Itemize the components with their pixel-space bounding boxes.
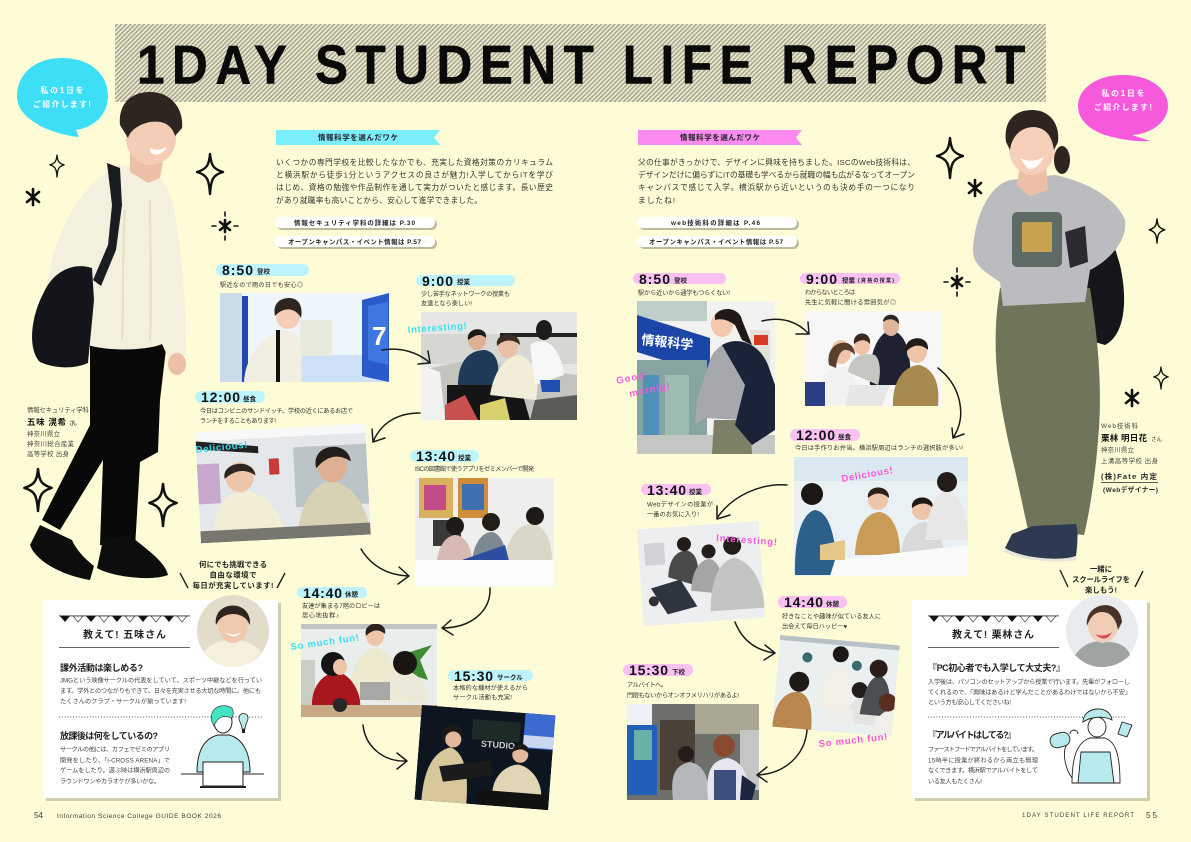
profile: Gomi: 神奈川総合産業 (27, 439, 75, 448)
timeline left: 12:00: 昼食 (243, 394, 256, 403)
link pills right: オープンキャンパス・イベント情報は P.57 (649, 237, 783, 246)
timeline right: 14:40: 出会えて毎日ハッピー♥ (782, 622, 847, 630)
photo 15:30: STUDIO (481, 739, 515, 751)
student photo: Gomi (30, 92, 186, 580)
timeline left: 12:00: 12:00 (201, 389, 240, 405)
timeline right: 15:30: 下校 (672, 667, 686, 676)
sparkles left (24, 154, 238, 526)
profile: Kuribayashi: さん (1151, 436, 1162, 443)
link pills right: web技術科の詳細は P.46 (670, 218, 760, 227)
timeline right: 15:30: アルバイトへ。 (627, 682, 667, 689)
Q1 right: てくれるので、『興味はあるけど学んだことがあるわけではないから不安』 (928, 688, 1131, 696)
Q1 left: たくさんのクラブ・サークルが揃っています! (60, 698, 186, 706)
Q1 right: 入学後は、パソコンのセットアップから授業で行います。先輩がフォローし (928, 678, 1130, 686)
timeline left: 15:30: サークル (497, 672, 523, 682)
bunting left (59, 616, 190, 622)
footer left: 54 (34, 810, 43, 820)
Q2 left (60, 730, 170, 786)
Q1 left: JMGという映像サークルの代表をしていて、スポーツ中継などを行ってい (60, 676, 262, 684)
quote right: 一緒に (1090, 564, 1112, 574)
photo 9:00 (805, 311, 941, 406)
timeline right: 15:30 (623, 662, 759, 800)
panel: reason right (637, 130, 915, 249)
timeline left: 9:00: 少し苦手なネットワークの授業も (421, 290, 510, 298)
Q2 right (928, 730, 1038, 786)
timeline left: 15:30: 本格的な機材が使えるから (453, 684, 528, 692)
reason text right (638, 157, 915, 205)
footer right: 1DAY STUDENT LIFE REPORT (1022, 812, 1134, 819)
icon: student with laptop (181, 706, 264, 788)
timeline right: 13:40 (637, 482, 765, 626)
portrait left (197, 595, 269, 667)
photo 8:50: 情報科学 (641, 332, 694, 352)
timeline right: 8:50 (633, 271, 775, 454)
timeline left: 15:30: 15:30 (454, 668, 493, 684)
photo 14:40 (301, 624, 437, 717)
left speech bubble (17, 58, 108, 137)
timeline right: 9:00: (資格の授業) (858, 277, 894, 284)
photo 15:30 (627, 704, 759, 800)
profile: Kuribayashi: (Webデザイナー) (1103, 485, 1158, 494)
panel: Q&A Kuribayashi (912, 595, 1150, 801)
photo 12:00 (794, 457, 968, 576)
timeline right: 9:00: 9:00 (806, 271, 837, 287)
handwritten exclamations: So much fun! (290, 632, 360, 653)
photo 8:50: 7 (372, 321, 386, 351)
timeline right: 9:00: わからないところは (805, 290, 855, 296)
right speech bubble: ご紹介します! (1094, 102, 1152, 112)
timeline right: 8:50: 登校 (674, 276, 688, 284)
Q1 left (60, 662, 262, 706)
footer left: Information Science College GUIDE BOOK 2026 (57, 813, 221, 820)
timeline left: 9:00: 9:00 (422, 273, 453, 289)
Q2 right: 15時半に授業が終わるから両立も無理 (928, 756, 1038, 764)
Q2 right: ファーストフードでアルバイトをしています。 (928, 746, 1038, 754)
timeline right: 8:50: 8:50 (639, 271, 670, 287)
handwritten exclamations: Delicious! (195, 440, 248, 456)
handwritten exclamations: mornig! (628, 381, 671, 400)
profile: Gomi: さん (69, 420, 77, 427)
timeline left: 15:30 (414, 668, 555, 810)
panel: Q&A Gomi (43, 595, 281, 801)
right speech bubble: 私の1日を (1102, 88, 1145, 98)
timeline left: 9:00 (416, 273, 577, 420)
bunting right (928, 616, 1059, 622)
timeline right: 15:30: 15:30 (629, 662, 668, 678)
timeline right: 15:30: 門限もないからオンオフメリハリがあるよ! (627, 692, 739, 700)
handwritten exclamations: Interesting! (407, 321, 467, 336)
timeline left: 13:40: 13:40 (416, 448, 455, 464)
Q1 right: という方も安心してくださいね! (928, 698, 1011, 706)
profile: Kuribayashi: 神奈川県立 (1101, 445, 1135, 454)
handwritten exclamations: Good (615, 370, 645, 387)
link pills right (637, 217, 799, 249)
left speech bubble: ご紹介します! (33, 99, 91, 109)
card title right: 教えて! 栗林さん (952, 628, 1034, 641)
photo 9:00 (421, 312, 577, 420)
photo 13:40 (637, 521, 765, 626)
profile: Gomi: 情報セキュリティ学科 (27, 405, 90, 414)
Q2 right: 『アルバイトはしてる?』 (928, 730, 1016, 740)
timeline right: 14:40: 好きなことや趣味が似ている友人に (782, 612, 881, 620)
timeline left: 14:40: 休憩 (345, 590, 358, 598)
footer right (1022, 810, 1157, 820)
timeline right: 12:00: 昼食 (838, 432, 852, 441)
timeline left: 8:50: 駅近なので雨の日でも安心◎ (220, 281, 303, 289)
quote left: 自由な環境で (210, 570, 256, 580)
Q2 left: サークルの他には、カフェでゼミのアプリ (60, 746, 170, 754)
reason text left (276, 157, 553, 205)
title text: 1DAY STUDENT LIFE REPORT (137, 35, 1025, 96)
timeline right: 9:00: 授業 (842, 276, 856, 284)
timeline right: 13:40: Webデザインの授業が (647, 500, 714, 508)
Q2 right: なくできます。横浜駅でアルバイトをして (928, 766, 1038, 774)
timeline right: 12:00: 今日は手作りお弁当。横浜駅周辺はランチの選択肢が多い! (795, 444, 963, 452)
Q1 right (928, 662, 1131, 706)
timeline right: 9:00 (800, 271, 941, 406)
link pills left: 情報セキュリティ学科の詳細は P.30 (294, 218, 415, 227)
icon: part-time worker (1049, 709, 1132, 783)
timeline left: 13:40 (410, 448, 554, 587)
ribbon heading right (638, 130, 802, 145)
timeline left: 14:40: 居心地抜群♪ (302, 612, 339, 620)
left speech bubble: 私の1日を (40, 85, 84, 95)
timeline left: 13:40: ISCの図書館で使うアプリをゼミメンバーで開発 (415, 465, 535, 473)
quote left: 毎日が充実しています! (192, 581, 274, 590)
timeline left: 14:40: 14:40 (303, 585, 342, 601)
right speech bubble (1078, 75, 1168, 141)
arrows left (361, 349, 490, 769)
reason text right: ましたね! (638, 196, 675, 205)
profile: Kuribayashi (1101, 421, 1162, 494)
timeline left: 12:00 (195, 389, 371, 543)
timeline right: 13:40: 授業 (689, 487, 702, 496)
link pills left (275, 217, 437, 249)
quote left (180, 560, 285, 590)
handwritten exclamations: Delicious! (841, 465, 894, 485)
footer left (34, 810, 221, 820)
card title left: 教えて! 五味さん (83, 628, 166, 641)
Q2 left: ゲームをしたり。遊ぶ時は横浜駅周辺の (60, 766, 170, 774)
timeline left: 9:00: 授業 (457, 277, 470, 286)
footer right: 55 (1146, 810, 1157, 820)
timeline left: 8:50: 8:50 (222, 262, 253, 278)
reason text left: があり就職率も高いことから、安心して進学できました。 (276, 195, 482, 205)
photo 8:50 (637, 301, 775, 454)
timeline right: 13:40: 13:40 (647, 482, 686, 498)
reason text right: 父の仕事がきっかけで、デザインに興味を持ちました。ISCのWeb技術科は、 (638, 157, 915, 167)
Q2 left: ラウンドワンやカラオケが多いかな。 (60, 778, 160, 786)
profile: Kuribayashi: (株)Fate 内定 (1101, 471, 1157, 481)
timeline right: 14:40: 14:40 (784, 594, 823, 610)
quote right (1060, 564, 1143, 594)
Q2 left: 放課後は何をしているの? (60, 730, 158, 741)
timeline left: 14:40: 友達が集まる7階のロビーは (302, 602, 380, 610)
photo 14:40 (772, 635, 902, 737)
timeline left: 13:40: 授業 (458, 453, 472, 462)
timeline right: 14:40 (772, 594, 902, 737)
Q2 right: いる友人もたくさん! (928, 778, 982, 786)
photo 15:30 (414, 705, 555, 810)
timeline right: 9:00: 先生に気軽に聞ける雰囲気が◎ (805, 298, 896, 306)
ribbon heading right: 情報科学を選んだワケ (680, 133, 760, 142)
ribbon heading left: 情報科学を選んだワケ (318, 133, 398, 142)
photo 8:50 (220, 293, 389, 382)
quote right: スクールライフを (1072, 575, 1130, 584)
timeline left: 9:00: 友達となら楽しい! (421, 300, 472, 308)
profile: Kuribayashi: 上溝高等学校 出身 (1101, 456, 1159, 465)
profile: Gomi: 高等学校 出身 (27, 449, 70, 458)
panel: reason left (275, 130, 553, 249)
quote left: 何にでも挑戦できる (199, 560, 267, 569)
timeline right: 12:00 (790, 427, 968, 576)
photo 13:40 (415, 478, 554, 587)
profile: Gomi: 神奈川県立 (27, 429, 61, 438)
profile: Gomi (27, 405, 90, 458)
Q2 left: 開発をしたり、「i-CROSS ARENA」で (60, 756, 170, 764)
reason text left: はじめ、資格の勉強や作品制作を通して実力がついたと感じます。長い歴史 (276, 182, 553, 192)
quote right: 楽しもう! (1085, 586, 1117, 594)
timeline left: 14:40 (297, 585, 437, 717)
Q1 left: 課外活動は楽しめる? (60, 662, 143, 673)
timeline left: 8:50: 登校 (257, 266, 270, 276)
sparkles right (937, 138, 1168, 406)
timeline right: 8:50: 駅から近いから通学もつらくない! (638, 289, 730, 297)
Q1 right: 『PC初心者でも入学して大丈夫?』 (928, 662, 1065, 673)
Q1 left: ます。学外とのつながりもできて、日々を充実させる大切な時間に。他にも (60, 687, 261, 695)
timeline left: 12:00: ランチをすることもあります! (200, 418, 276, 425)
timeline right: 14:40: 休憩 (826, 599, 840, 608)
portrait right (1066, 595, 1138, 667)
title banner (115, 24, 1046, 102)
timeline right: 13:40: 一番のお気に入り! (647, 510, 699, 518)
reason text left: と横浜駅から徒歩1分というアクセスの良さが魅力!入学してからITを学び (276, 170, 553, 180)
profile: Kuribayashi: Web技術科 (1101, 421, 1139, 430)
profile: Gomi: 五味 滉希 (27, 417, 66, 427)
reason text right: キャンパスで感じて入学。横浜駅から近いというのも決め手の一つになり (638, 182, 915, 192)
timeline left: 12:00: 今日はコンビニのサンドイッチ。学校の近くにあるお店で (200, 407, 353, 415)
reason text right: デザインだけに偏らずにITの基礎も学べるから就職の幅も広がるなってオープン (638, 170, 915, 180)
handwritten exclamations: So much fun! (818, 732, 888, 750)
arrows right (717, 319, 964, 782)
student photo: Kuribayashi (973, 110, 1125, 562)
timeline right: 12:00: 12:00 (796, 427, 835, 443)
handwritten exclamations (195, 321, 894, 750)
timeline left: 8:50 (216, 262, 390, 382)
profile: Kuribayashi: 栗林 明日花 (1101, 433, 1147, 443)
ribbon heading left (276, 130, 440, 145)
handwritten exclamations: Interesting! (716, 533, 777, 548)
reason text left: いくつかの専門学校を比較したなかでも、充実した資格対策のカリキュラム (276, 157, 553, 167)
photo 12:00 (195, 424, 371, 543)
link pills left: オープンキャンパス・イベント情報は P.57 (288, 237, 421, 246)
timeline left: 15:30: サークル活動も充実! (453, 694, 512, 702)
